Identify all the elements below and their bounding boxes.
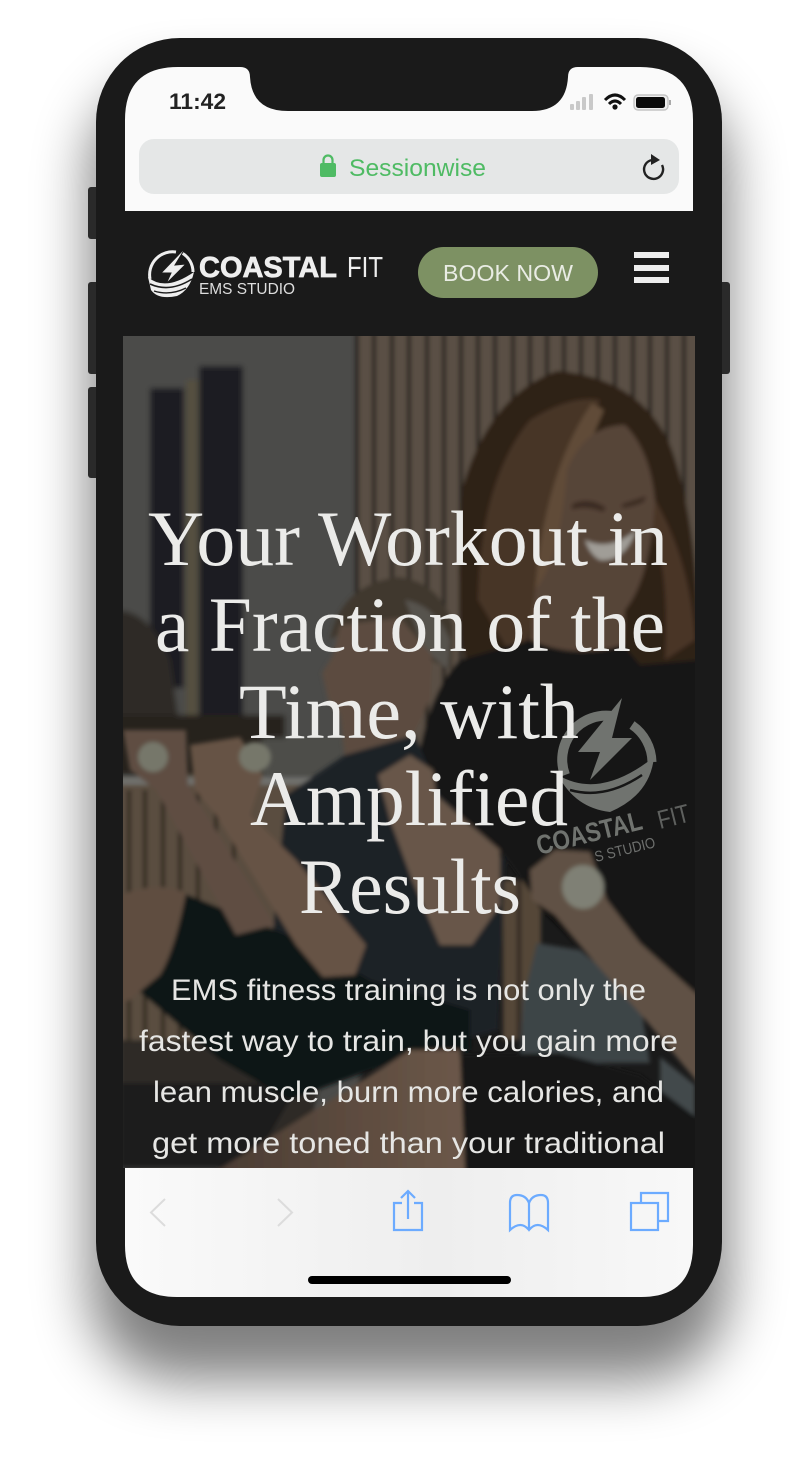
man face (322, 618, 432, 760)
hero body text: get more toned than your traditional (152, 1127, 665, 1160)
logo tagline: EMS STUDIO (199, 281, 295, 298)
windows (150, 388, 184, 688)
shirt logo mark (558, 698, 654, 812)
url text: Sessionwise (349, 155, 486, 182)
hero headline: Results (299, 843, 521, 930)
icon: hamburger menu (634, 252, 669, 283)
left thigh (120, 887, 186, 1003)
logo name: COASTAL (199, 252, 337, 284)
woman hair (460, 370, 695, 668)
horizontal bar (120, 777, 332, 785)
address bar (139, 139, 679, 194)
man torso (270, 735, 505, 1060)
woman shirt (418, 640, 700, 1000)
floor bottom left (123, 1038, 321, 1138)
woman forearm and fist (530, 850, 700, 1085)
nav bar (123, 211, 695, 336)
shirt logo (533, 698, 693, 866)
logo mark (148, 247, 194, 297)
person far left (123, 609, 179, 718)
icon: lock (320, 156, 336, 177)
phone drop shadow (90, 80, 728, 1380)
hero body text: fastest way to train, but you gain more (139, 1025, 678, 1058)
logo: FIT (347, 252, 383, 284)
home indicator (308, 1276, 511, 1284)
status icons: signal, wifi, battery (570, 94, 671, 110)
hero body text (139, 974, 678, 1160)
icon: reload (644, 154, 663, 179)
shirt logo: FIT (654, 798, 693, 835)
phone side buttons (88, 187, 730, 478)
hero headline (148, 495, 668, 930)
wall (115, 330, 360, 1180)
shorts (140, 893, 470, 1100)
centre arm and fist (378, 755, 500, 945)
icon: share (394, 1191, 422, 1230)
bottom right dark (455, 1053, 700, 1175)
photo background (115, 330, 360, 1180)
hero headline: Your Workout in (148, 495, 668, 582)
hero headline: Time, with (239, 668, 579, 755)
thigh (215, 1050, 465, 1172)
seat (520, 943, 650, 1063)
second arm and fist (190, 737, 366, 977)
icon: forward chevron (278, 1199, 292, 1226)
screen status area (125, 67, 693, 211)
icon: bookmarks (510, 1195, 548, 1230)
shirt logo: S STUDIO (593, 834, 657, 866)
hero headline: a Fraction of the (155, 581, 665, 668)
logo (148, 247, 383, 298)
wood slats (357, 330, 702, 750)
hero body text: EMS fitness training is not only the (171, 974, 646, 1007)
hero photo (115, 330, 702, 1180)
icon: tabs (631, 1193, 668, 1230)
wood strip centre right (503, 880, 541, 1040)
dumbbells (138, 742, 168, 772)
icon: back chevron (151, 1199, 165, 1226)
status bar time: 11:42 (169, 89, 226, 114)
woman face and neck (530, 425, 655, 651)
man hair (330, 577, 453, 670)
left arm and fist (123, 730, 275, 935)
hero body text: lean muscle, burn more calories, and (153, 1076, 664, 1109)
background behind arms (115, 715, 285, 775)
phone body (96, 38, 722, 1326)
hero headline: Amplified (250, 755, 568, 842)
lower left wood (120, 785, 300, 1055)
bottom toolbar (125, 1168, 693, 1297)
shirt logo text: COASTAL (533, 806, 645, 861)
book now button: BOOK NOW (443, 260, 573, 286)
book now button (418, 247, 598, 298)
